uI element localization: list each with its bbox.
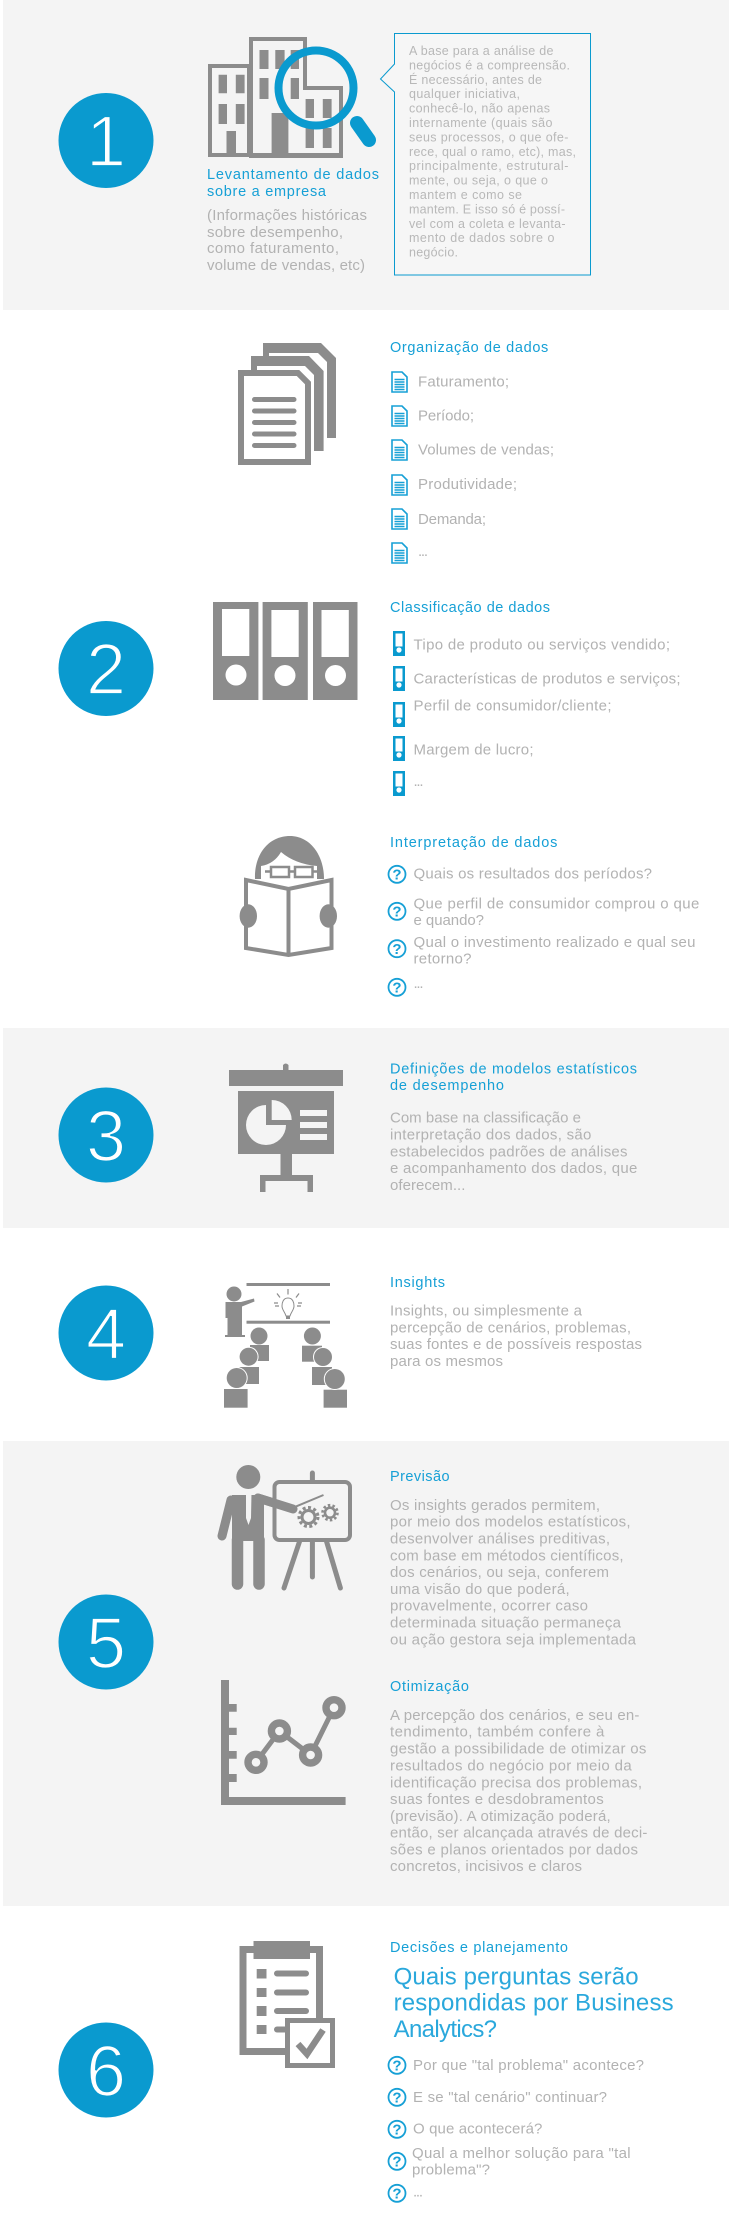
list: classificação: Perfil de consumidor/cliente;: [414, 698, 612, 715]
list: perguntas: O que acontecerá?: [413, 2120, 542, 2137]
text: insights: para os mesmos: [390, 1353, 503, 1370]
text: otimização: identificação precisa dos problemas,: [390, 1774, 642, 1791]
text: modelos estatísticos: Com base na classificação e: [390, 1110, 581, 1127]
callout: A base para a análise de: [409, 44, 554, 58]
step 1 badge: [58, 93, 154, 188]
callout: mento de dados sobre o: [409, 231, 554, 245]
list: perguntas: ?: [392, 2122, 402, 2138]
step 1 badge: 1: [86, 102, 126, 182]
text: modelos estatísticos: oferecem...: [390, 1177, 465, 1194]
list: interpretação: ...: [414, 975, 424, 992]
text: previsão: ou ação gestora seja implementada: [390, 1631, 637, 1648]
step 6 badge: [58, 2022, 154, 2118]
text: otimização: então, ser alcançada através de deci-: [390, 1825, 647, 1842]
callout: [380, 34, 590, 275]
text: otimização: [390, 1707, 647, 1875]
icon: person reading: [240, 836, 337, 956]
callout: negócios é a compreensão.: [409, 58, 570, 72]
text: previsão: provavelmente, ocorrer caso: [390, 1598, 588, 1615]
big heading: perguntas: respondidas por Business: [394, 1990, 674, 2017]
text: previsão: dos cenários, ou seja, conferem: [390, 1564, 609, 1581]
callout: vel com a coleta e levanta-: [409, 217, 566, 231]
list: interpretação: retorno?: [414, 951, 472, 968]
heading: decisões: Decisões e planejamento: [390, 1940, 568, 1956]
list: interpretação: ?: [392, 866, 402, 884]
icon: binders: [213, 602, 358, 700]
list: perguntas: ?: [392, 2186, 402, 2202]
step 6 badge: 6: [86, 2032, 126, 2112]
heading: levantamento: Levantamento de dados: [207, 167, 379, 183]
callout: mente, ou seja, o que o: [409, 174, 548, 188]
list: organização: Faturamento;: [418, 374, 509, 391]
heading: insights: Insights: [390, 1275, 445, 1291]
list: interpretação: ?: [392, 941, 402, 958]
list: organização: ...: [418, 543, 428, 560]
icon: stacked documents: [241, 343, 336, 462]
text: otimização: A percepção dos cenários, e seu en-: [390, 1707, 639, 1724]
heading: modelos estatísticos: de desempenho: [390, 1078, 504, 1094]
step 4 badge: 4: [86, 1295, 126, 1375]
list: interpretação: Quais os resultados dos períodos?: [414, 865, 652, 882]
text: otimização: sões e planos orientados por dados: [390, 1841, 638, 1858]
callout: conhecê-lo, não apenas: [409, 102, 550, 116]
callout: seus processos, o que ofe-: [409, 130, 568, 144]
list: organização: Volumes de vendas;: [418, 442, 554, 458]
callout: negócio.: [409, 246, 458, 260]
heading: levantamento: [207, 167, 379, 200]
text: previsão: por meio dos modelos estatísticos,: [390, 1514, 631, 1531]
text: modelos estatísticos: estabelecidos padrões de análises: [390, 1143, 628, 1160]
heading: classificação: Classificação de dados: [390, 600, 550, 616]
list: perguntas: E se "tal cenário" continuar?: [413, 2089, 607, 2106]
list: classificação: Características de produtos e serviços;: [414, 671, 680, 688]
list: perguntas: ...: [413, 2184, 423, 2201]
text: otimização: (previsão). A otimização poderá,: [390, 1808, 611, 1825]
text: insights: [390, 1302, 642, 1370]
text: otimização: gestão a possibilidade de otimizar os: [390, 1741, 646, 1758]
panel: step 1 background: [3, 0, 729, 310]
list: perguntas: ?: [392, 2058, 402, 2074]
text: otimização: resultados do negócio por meio da: [390, 1757, 632, 1774]
icon: presentation board with pie chart: [229, 1064, 343, 1192]
heading: previsão: Previsão: [390, 1469, 450, 1485]
list: classificação: ...: [414, 773, 424, 790]
text: informações históricas: [207, 207, 367, 274]
text: informações históricas: (Informações históricas: [207, 207, 367, 224]
list: organização: Demanda;: [418, 511, 486, 528]
step 4 badge: [58, 1286, 154, 1380]
icon: buildings with magnifier: [208, 37, 369, 158]
step 5 badge: [58, 1594, 154, 1690]
heading: modelos estatísticos: [390, 1061, 637, 1094]
step 5 badge: 5: [86, 1604, 126, 1684]
list: interpretação: e quando?: [414, 912, 484, 929]
callout: internamente (quais são: [409, 116, 553, 130]
heading: otimização: Otimização: [390, 1679, 469, 1695]
text: informações históricas: volume de vendas, etc): [207, 257, 365, 274]
text: otimização: suas fontes e desdobramentos: [390, 1791, 604, 1808]
callout: mantem e como se: [409, 188, 522, 202]
text: otimização: concretos, incisivos e claros: [390, 1858, 582, 1875]
text: previsão: [390, 1497, 637, 1648]
big heading: perguntas: Quais perguntas serão: [394, 1963, 639, 1990]
list: organização: Produtividade;: [418, 476, 517, 493]
list: interpretação: [388, 865, 699, 996]
text: insights: percepção de cenários, problemas,: [390, 1319, 631, 1336]
list: interpretação: Que perfil de consumidor comprou o que: [414, 895, 699, 912]
text: modelos estatísticos: interpretação dos dados, são: [390, 1126, 591, 1143]
list: organização: [392, 372, 554, 563]
callout: qualquer iniciativa,: [409, 87, 520, 101]
heading: levantamento: sobre a empresa: [207, 184, 327, 200]
text: previsão: uma visão do que poderá,: [390, 1581, 570, 1598]
list: organização: Período;: [418, 408, 474, 424]
icon: line chart: [221, 1680, 346, 1805]
callout: principalmente, estrutural-: [409, 159, 568, 173]
icon: audience and presenter with light bulb: [224, 1283, 347, 1408]
step 3 badge: 3: [86, 1097, 126, 1177]
panel: step 3 background: [3, 1028, 729, 1228]
list: perguntas: ?: [392, 2154, 402, 2170]
text: otimização: tendimento, também confere à: [390, 1724, 605, 1741]
list: classificação: [393, 631, 680, 796]
text: insights: Insights, ou simplesmente a: [390, 1302, 583, 1319]
text: previsão: desenvolver análises preditivas,: [390, 1531, 610, 1548]
callout: mantem. E isso só é possí-: [409, 202, 565, 216]
text: previsão: Os insights gerados permitem,: [390, 1497, 600, 1514]
text: previsão: determinada situação permaneça: [390, 1615, 622, 1632]
heading: interpretação: Interpretação de dados: [390, 835, 557, 851]
step 3 badge: [58, 1088, 154, 1182]
panel: step 5 background: [3, 1441, 729, 1906]
list: interpretação: ?: [392, 904, 402, 920]
text: insights: suas fontes e de possíveis respostas: [390, 1336, 642, 1353]
text: modelos estatísticos: e acompanhamento dos dados, que: [390, 1160, 637, 1177]
text: informações históricas: como faturamento,: [207, 240, 339, 257]
icon: presenter with easel and gears: [222, 1465, 350, 1588]
list: perguntas: ?: [392, 2090, 402, 2106]
step 2 badge: 2: [86, 630, 126, 710]
list: perguntas: Qual a melhor solução para "tal: [412, 2145, 631, 2162]
list: interpretação: Qual o investimento realizado e qual seu: [414, 934, 696, 951]
callout: É necessário, antes de: [409, 72, 542, 87]
callout: rece, qual o ramo, etc), mas,: [409, 145, 576, 159]
heading: organização: Organização de dados: [390, 340, 548, 356]
list: classificação: Tipo de produto ou serviços vendido;: [414, 636, 670, 653]
list: perguntas: Por que "tal problema" acontece?: [413, 2057, 644, 2074]
icon: clipboard with check: [243, 1941, 332, 2066]
heading: modelos estatísticos: Definições de modelos estatísticos: [390, 1061, 637, 1077]
big heading: perguntas: [394, 1963, 674, 2043]
text: previsão: com base em métodos científicos,: [390, 1547, 624, 1564]
text: informações históricas: sobre desempenho,: [207, 224, 343, 241]
step 2 badge: [58, 621, 154, 716]
text: modelos estatísticos: [390, 1110, 637, 1194]
list: interpretação: ?: [392, 980, 402, 996]
list: perguntas: [388, 2057, 644, 2202]
list: perguntas: problema"?: [412, 2162, 490, 2179]
list: classificação: Margem de lucro;: [414, 741, 534, 758]
big heading: perguntas: Analytics?: [394, 2016, 497, 2043]
